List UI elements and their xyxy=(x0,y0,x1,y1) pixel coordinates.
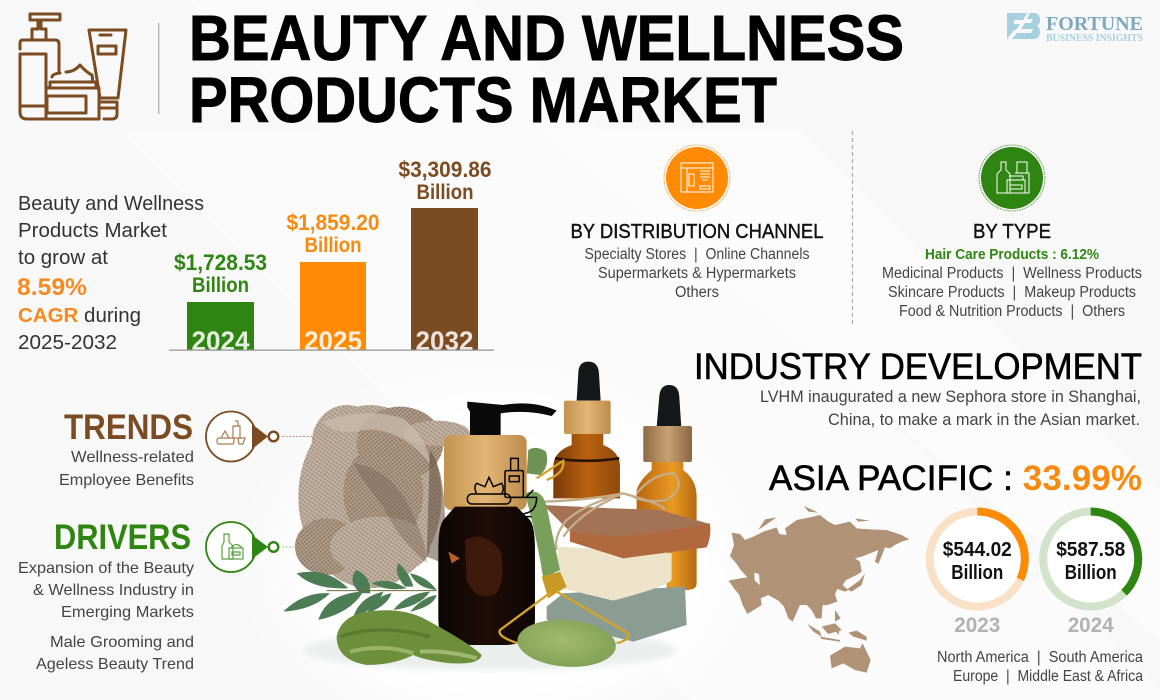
donut: 2024: $587.58 xyxy=(1056,539,1125,561)
loofah xyxy=(295,405,470,588)
bar 2024: 2024 xyxy=(192,326,250,356)
gua sha stone xyxy=(337,610,482,665)
panel: trends: Wellness-related xyxy=(71,449,194,466)
icon: spa overlay xyxy=(467,458,537,517)
panel: by distribution channel: Supermarkets & Hypermarkets xyxy=(598,265,796,282)
text block: market growth: 8.59% xyxy=(17,274,87,301)
bar 2032: 2032 xyxy=(416,326,474,356)
panel: trends xyxy=(59,408,325,489)
panel: drivers: Ageless Beauty Trend xyxy=(36,656,194,673)
text block: other regions: North America | South America xyxy=(937,649,1143,666)
text block: market growth: Beauty and Wellness xyxy=(18,192,204,215)
text block: market growth: to grow at xyxy=(18,246,108,269)
soap bars xyxy=(543,505,710,642)
bar 2025: $1,859.20 xyxy=(286,210,380,235)
icon: cosmetics products xyxy=(20,14,126,119)
text block: market growth: CAGR during xyxy=(18,304,141,327)
panel: by type: Hair Care Products : 6.12% xyxy=(925,247,1099,263)
panel: drivers: DRIVERS xyxy=(54,518,191,557)
logo: Fortune Business Insights: BUSINESS INSIGHTS xyxy=(1046,33,1143,44)
panel: by type: Skincare Products | Makeup Products xyxy=(888,284,1136,301)
dropper bottle: back right xyxy=(637,385,697,590)
donut: 2024: 2024 xyxy=(1068,614,1114,637)
title: BEAUTY AND WELLNESS xyxy=(189,2,904,74)
bar 2025: Billion xyxy=(304,234,362,257)
donut: 2023: 2023 xyxy=(954,614,1000,637)
map: asia pacific xyxy=(729,506,909,673)
bar 2032 xyxy=(398,157,492,356)
donut: 2024 xyxy=(1043,512,1138,637)
donut: 2023: $544.02 xyxy=(943,539,1012,561)
panel: trends: Employee Benefits xyxy=(59,472,194,489)
bar 2024 xyxy=(174,250,267,356)
donut: 2023: Billion xyxy=(951,562,1003,584)
bar 2024: $1,728.53 xyxy=(174,250,267,275)
logo: Fortune Business Insights: FORTUNE xyxy=(1046,14,1143,35)
bar 2032: Billion xyxy=(416,181,474,204)
leaves xyxy=(283,563,437,620)
dropper bottle: back left xyxy=(553,362,620,498)
text block: other regions: Europe | Middle East & Africa xyxy=(953,668,1143,685)
bar 2025: 2025 xyxy=(304,326,362,356)
title: PRODUCTS MARKET xyxy=(189,64,777,136)
panel: by type: Medicinal Products | Wellness Products xyxy=(882,265,1142,282)
shadow xyxy=(303,630,677,670)
donut: 2023 xyxy=(930,511,1025,637)
panel: by distribution channel: Others xyxy=(675,284,719,301)
panel: by distribution channel xyxy=(570,145,824,301)
panel: drivers xyxy=(18,518,298,673)
panel: by type: BY TYPE xyxy=(973,221,1051,243)
donut: 2024: Billion xyxy=(1065,562,1117,584)
divider: header xyxy=(158,23,159,114)
text block: market growth: 2025-2032 xyxy=(18,331,117,354)
panel: drivers: Male Grooming and xyxy=(50,634,194,651)
pump bottle xyxy=(438,402,557,645)
photo: beauty products still life xyxy=(283,362,710,670)
text block: market growth xyxy=(17,192,204,354)
divider: panels xyxy=(852,131,854,327)
panel: drivers: & Wellness Industry in xyxy=(33,582,194,599)
title xyxy=(189,2,904,136)
panel: drivers: Emerging Markets xyxy=(61,604,194,621)
text block: other regions xyxy=(937,649,1143,685)
jade roller xyxy=(500,448,628,670)
text block: industry development xyxy=(760,388,1141,429)
twine xyxy=(543,473,679,550)
icon: beauty bottles xyxy=(979,145,1045,211)
panel: by type: Food & Nutrition Products | Others xyxy=(899,303,1125,320)
icon: bottles pin xyxy=(206,522,298,572)
text block: industry development: China, to make a mark in the Asian market. xyxy=(828,411,1140,429)
bar 2032: $3,309.86 xyxy=(398,157,492,182)
bar chart: market size xyxy=(169,157,494,356)
heading: industry development: INDUSTRY DEVELOPMENT xyxy=(694,346,1142,387)
bar 2025 xyxy=(286,210,380,356)
icon: spa pin xyxy=(206,412,325,462)
panel: trends: TRENDS xyxy=(64,408,193,447)
panel: by distribution channel: Specialty Stores | Online Channels xyxy=(584,246,810,263)
panel: by type xyxy=(882,145,1142,320)
panel: by distribution channel: BY DISTRIBUTION CHANNEL xyxy=(570,221,824,243)
text block: industry development: LVHM inaugurated a new Sephora store in Shanghai, xyxy=(760,388,1141,406)
text block: market growth: Products Market xyxy=(18,219,167,242)
logo: Fortune Business Insights xyxy=(1007,13,1143,44)
panel: drivers: Expansion of the Beauty xyxy=(18,560,194,577)
bar 2024: Billion xyxy=(192,274,249,297)
heading: asia pacific share: ASIA PACIFIC : 33.99% xyxy=(769,459,1142,498)
icon: online store xyxy=(664,145,730,211)
